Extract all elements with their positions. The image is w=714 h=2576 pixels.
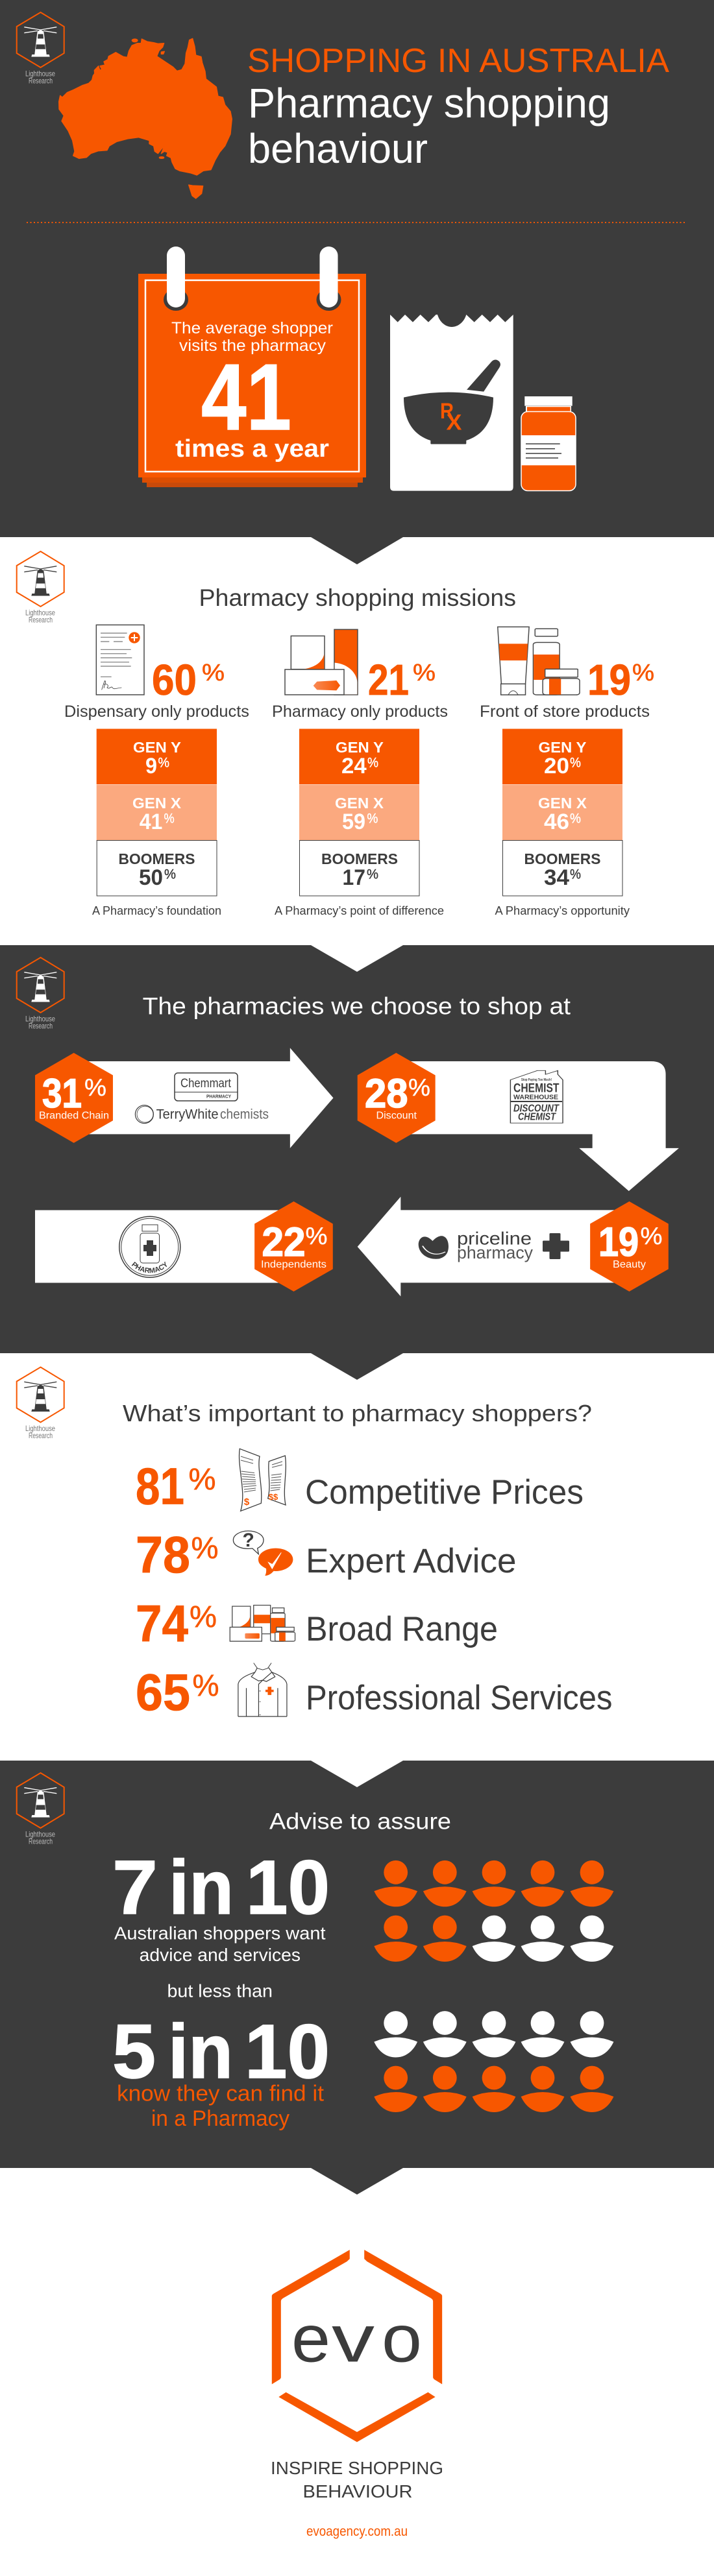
badge: 22% independents bbox=[254, 1201, 333, 1292]
generation table: BOOMERS bbox=[321, 850, 398, 867]
generation table: 17 bbox=[343, 865, 365, 890]
badge: 28% discount: 28 bbox=[365, 1071, 408, 1116]
tagline: BEHAVIOUR bbox=[302, 2481, 413, 2501]
badge: 31% branded chain bbox=[35, 1053, 113, 1143]
generation table: 41 bbox=[140, 810, 162, 834]
tagline bbox=[271, 2458, 443, 2501]
stat: 21%: 21 bbox=[368, 656, 409, 704]
logo: evo hexagon bbox=[272, 2250, 442, 2442]
map of Australia bbox=[59, 38, 232, 199]
title bbox=[247, 42, 669, 172]
generation table: GEN X bbox=[538, 795, 587, 812]
stat: 60%: 60 bbox=[152, 656, 197, 704]
stat: 7 in 10: in bbox=[169, 1845, 234, 1931]
title: behaviour bbox=[248, 125, 428, 172]
stat: 5 in 10 bbox=[112, 2009, 330, 2131]
generation table: 46 bbox=[544, 810, 569, 834]
badge: 19% beauty: 19 bbox=[598, 1220, 639, 1265]
icon: speech bubbles bbox=[233, 1530, 293, 1576]
panel: dispensary only products: A Pharmacy’s foundation bbox=[92, 904, 221, 917]
tagline: INSPIRE SHOPPING bbox=[271, 2458, 443, 2478]
row: professional services: % bbox=[192, 1668, 219, 1702]
arrow: section 4 to 5 bbox=[311, 1761, 403, 1787]
generation table: % bbox=[367, 811, 378, 826]
stat: 21%: % bbox=[413, 659, 436, 686]
row: competitive prices: 81 bbox=[136, 1457, 184, 1515]
icon: speech bubbles: ? bbox=[243, 1530, 254, 1551]
logo: Lighthouse Research advise: Research bbox=[29, 1837, 53, 1846]
title: SHOPPING IN AUSTRALIA bbox=[247, 42, 669, 80]
generation table bbox=[299, 729, 419, 896]
badge: 22% independents: Independents bbox=[261, 1259, 326, 1270]
stat: 19%: % bbox=[632, 659, 654, 686]
stat: 7 in 10: advice and services bbox=[140, 1945, 301, 1965]
panel: pharmacy only products: Pharmacy only products bbox=[272, 703, 448, 721]
badge: 31% branded chain: 31 bbox=[42, 1071, 82, 1116]
logo: Lighthouse Research header: Lighthouse bbox=[25, 69, 55, 78]
icon: receipts: $ bbox=[244, 1497, 250, 1508]
logo: Lighthouse Research missions: Lighthouse bbox=[25, 608, 55, 618]
logo: Chemist Warehouse: DISCOUNT bbox=[513, 1103, 560, 1114]
arrow: beauty bbox=[358, 1197, 628, 1296]
stat: 5 in 10: in bbox=[168, 2009, 233, 2095]
arrow: branded chain bbox=[73, 1048, 333, 1148]
arrow: discount bbox=[396, 1061, 679, 1191]
row: broad range: % bbox=[190, 1599, 217, 1633]
row: expert advice: Expert Advice bbox=[306, 1542, 517, 1580]
badge: 19% beauty: % bbox=[640, 1223, 662, 1249]
logo: evo hexagon: v bbox=[332, 2302, 375, 2376]
arrow: section 1 to 2 bbox=[311, 537, 403, 564]
icon: prescription document bbox=[96, 625, 144, 695]
heading: pharmacies: The pharmacies we choose to shop at bbox=[143, 993, 571, 1020]
logo: Priceline Pharmacy: priceline bbox=[457, 1229, 532, 1248]
heading: important to shoppers: What’s important to pharmacy shoppers? bbox=[123, 1400, 592, 1426]
badge: 19% beauty bbox=[590, 1201, 669, 1292]
logo: Chemist Warehouse: CHEMIST bbox=[513, 1082, 560, 1095]
logo: Lighthouse Research important: Lighthouse bbox=[25, 1424, 55, 1433]
row: broad range bbox=[136, 1595, 498, 1652]
row: expert advice bbox=[136, 1526, 517, 1583]
logo: Lighthouse Research missions: Research bbox=[29, 615, 53, 624]
panel: pharmacy only products bbox=[272, 629, 448, 917]
logo: evo hexagon: e bbox=[291, 2302, 330, 2376]
icon: receipts: $$ bbox=[269, 1492, 278, 1502]
icon: medicine boxes bbox=[285, 629, 358, 695]
stat: 19%: 19 bbox=[587, 656, 631, 704]
logo: Lighthouse Research header bbox=[17, 12, 64, 86]
badge: 31% branded chain: % bbox=[84, 1074, 106, 1101]
badge: 19% beauty: Beauty bbox=[613, 1259, 646, 1270]
row: professional services: Professional Services bbox=[306, 1679, 613, 1717]
generation table: % bbox=[570, 755, 581, 771]
logo: Priceline Pharmacy: pharmacy bbox=[457, 1243, 533, 1262]
website: evoagency.com.au bbox=[306, 2524, 408, 2539]
stat: 5 in 10: 10 bbox=[245, 2009, 330, 2095]
generation table: 34 bbox=[544, 865, 569, 890]
generation table: % bbox=[367, 755, 378, 771]
panel: front of store products: A Pharmacy’s opportunity bbox=[495, 904, 630, 917]
row: broad range: 74 bbox=[136, 1595, 188, 1652]
logo: Chemmart bbox=[175, 1073, 238, 1101]
generation table: % bbox=[367, 867, 378, 882]
calendar: 41 times a year: 41 bbox=[201, 344, 291, 450]
generation table: 20 bbox=[544, 754, 569, 778]
panel: front of store products bbox=[480, 627, 654, 917]
generation table: 24 bbox=[341, 754, 367, 778]
generation table: BOOMERS bbox=[118, 850, 195, 867]
row: competitive prices: % bbox=[188, 1462, 215, 1496]
badge: 31% branded chain: Branded Chain bbox=[39, 1111, 109, 1121]
generation table: 59 bbox=[342, 810, 365, 834]
generation table: 9 bbox=[145, 754, 157, 778]
generation table: GEN X bbox=[132, 795, 182, 812]
generation table: % bbox=[570, 811, 581, 826]
panel: dispensary only products: Dispensary only products bbox=[64, 703, 249, 721]
title: Pharmacy shopping bbox=[248, 80, 610, 126]
calendar: 41 times a year: visits the pharmacy bbox=[179, 337, 326, 355]
logo: independent pharmacy seal bbox=[119, 1216, 181, 1278]
text: but less than: but less than bbox=[167, 1981, 273, 2001]
icon: medicine bottle bbox=[521, 396, 576, 490]
stat: 5 in 10: in a Pharmacy bbox=[151, 2106, 289, 2131]
arrow: section 2 to 3 bbox=[311, 945, 403, 972]
logo: Lighthouse Research header: Research bbox=[29, 77, 53, 86]
generation table: GEN X bbox=[335, 795, 384, 812]
row: competitive prices: Competitive Prices bbox=[305, 1473, 584, 1511]
row: competitive prices bbox=[136, 1449, 584, 1515]
stat: 60%: % bbox=[202, 659, 225, 686]
row: professional services bbox=[136, 1663, 613, 1721]
generation table: GEN Y bbox=[539, 739, 587, 756]
row: professional services: 65 bbox=[136, 1663, 190, 1721]
logo: Chemmart: Chemmart bbox=[180, 1077, 232, 1090]
logo: Lighthouse Research missions bbox=[17, 551, 64, 624]
calendar: 41 times a year: times a year bbox=[175, 435, 329, 463]
generation table: GEN Y bbox=[336, 739, 384, 756]
logo: Terry White chemists bbox=[135, 1105, 269, 1124]
generation table bbox=[97, 729, 217, 896]
generation table: BOOMERS bbox=[524, 850, 601, 867]
icon: prescription bag with mortar and pestle: X bbox=[447, 410, 462, 435]
people grid: 5 in 10 bbox=[374, 2011, 613, 2112]
badge: 22% independents: % bbox=[305, 1223, 327, 1249]
generation table: % bbox=[164, 811, 175, 826]
generation table bbox=[502, 729, 622, 896]
row: expert advice: 78 bbox=[136, 1526, 190, 1583]
stat: 7 in 10: 10 bbox=[246, 1845, 330, 1931]
badge: 22% independents: 22 bbox=[262, 1220, 305, 1265]
generation table: % bbox=[158, 755, 169, 771]
logo: Lighthouse Research important: Research bbox=[29, 1431, 53, 1440]
logo: Chemist Warehouse: WAREHOUSE bbox=[513, 1094, 558, 1101]
generation table: % bbox=[570, 867, 581, 882]
logo: Priceline Pharmacy bbox=[419, 1229, 569, 1262]
calendar: 41 times a year: The average shopper bbox=[171, 319, 333, 337]
calendar: 41 times a year bbox=[138, 247, 366, 487]
stat: 5 in 10: know they can find it bbox=[117, 2081, 325, 2106]
row: broad range: Broad Range bbox=[306, 1610, 498, 1648]
stat: 7 in 10: 7 bbox=[112, 1845, 158, 1931]
bar: independents bbox=[35, 1210, 296, 1283]
logo: evo hexagon: o bbox=[382, 2302, 422, 2376]
logo: Chemist Warehouse: Stop Paying Too Much! bbox=[521, 1078, 552, 1082]
panel: pharmacy only products: A Pharmacy’s point of difference bbox=[275, 904, 444, 917]
panel: front of store products: Front of store products bbox=[480, 703, 650, 721]
heading: advise to assure: Advise to assure bbox=[269, 1809, 451, 1835]
logo: Lighthouse Research pharmacies bbox=[17, 957, 64, 1030]
logo: Lighthouse Research pharmacies: Lighthouse bbox=[25, 1015, 55, 1024]
icon: prescription bag with mortar and pestle: R bbox=[440, 399, 454, 424]
logo: Terry White chemists: chemists bbox=[220, 1107, 269, 1122]
stat: 7 in 10: Australian shoppers want bbox=[114, 1923, 326, 1944]
logo: Lighthouse Research pharmacies: Research bbox=[29, 1021, 53, 1030]
stat: 60% bbox=[152, 656, 225, 704]
people grid: 7 in 10 bbox=[374, 1860, 613, 1962]
arrow: section 3 to 4 bbox=[311, 1353, 403, 1380]
badge: 28% discount: Discount bbox=[376, 1111, 417, 1121]
generation table: % bbox=[164, 867, 176, 882]
icon: product range bbox=[230, 1606, 295, 1641]
icon: pharmacist coat bbox=[238, 1663, 287, 1716]
stat: 7 in 10 bbox=[112, 1845, 330, 1965]
logo: Chemist Warehouse: CHEMIST bbox=[518, 1112, 556, 1122]
heading: missions: Pharmacy shopping missions bbox=[199, 584, 516, 611]
generation table: 50 bbox=[139, 865, 163, 890]
stat: 5 in 10: 5 bbox=[112, 2009, 156, 2095]
logo: Lighthouse Research advise bbox=[17, 1773, 64, 1846]
icon: prescription bag with mortar and pestle bbox=[390, 315, 513, 491]
logo: independent pharmacy seal: PHARMACY bbox=[131, 1261, 167, 1273]
logo: Chemist Warehouse bbox=[510, 1070, 563, 1123]
icon: receipts bbox=[240, 1449, 286, 1511]
arrow: section 5 to 6 bbox=[311, 2168, 403, 2195]
generation table: GEN Y bbox=[133, 739, 181, 756]
icon: tube, bottle and jar bbox=[498, 627, 580, 695]
badge: 28% discount bbox=[358, 1053, 436, 1143]
row: expert advice: % bbox=[191, 1530, 218, 1565]
logo: Lighthouse Research important bbox=[17, 1367, 64, 1440]
logo: Lighthouse Research advise: Lighthouse bbox=[25, 1829, 55, 1838]
logo: Terry White chemists: TerryWhite bbox=[156, 1107, 219, 1122]
badge: 28% discount: % bbox=[408, 1074, 430, 1101]
panel: dispensary only products bbox=[64, 625, 249, 917]
logo: Chemmart: PHARMACY bbox=[206, 1095, 231, 1099]
